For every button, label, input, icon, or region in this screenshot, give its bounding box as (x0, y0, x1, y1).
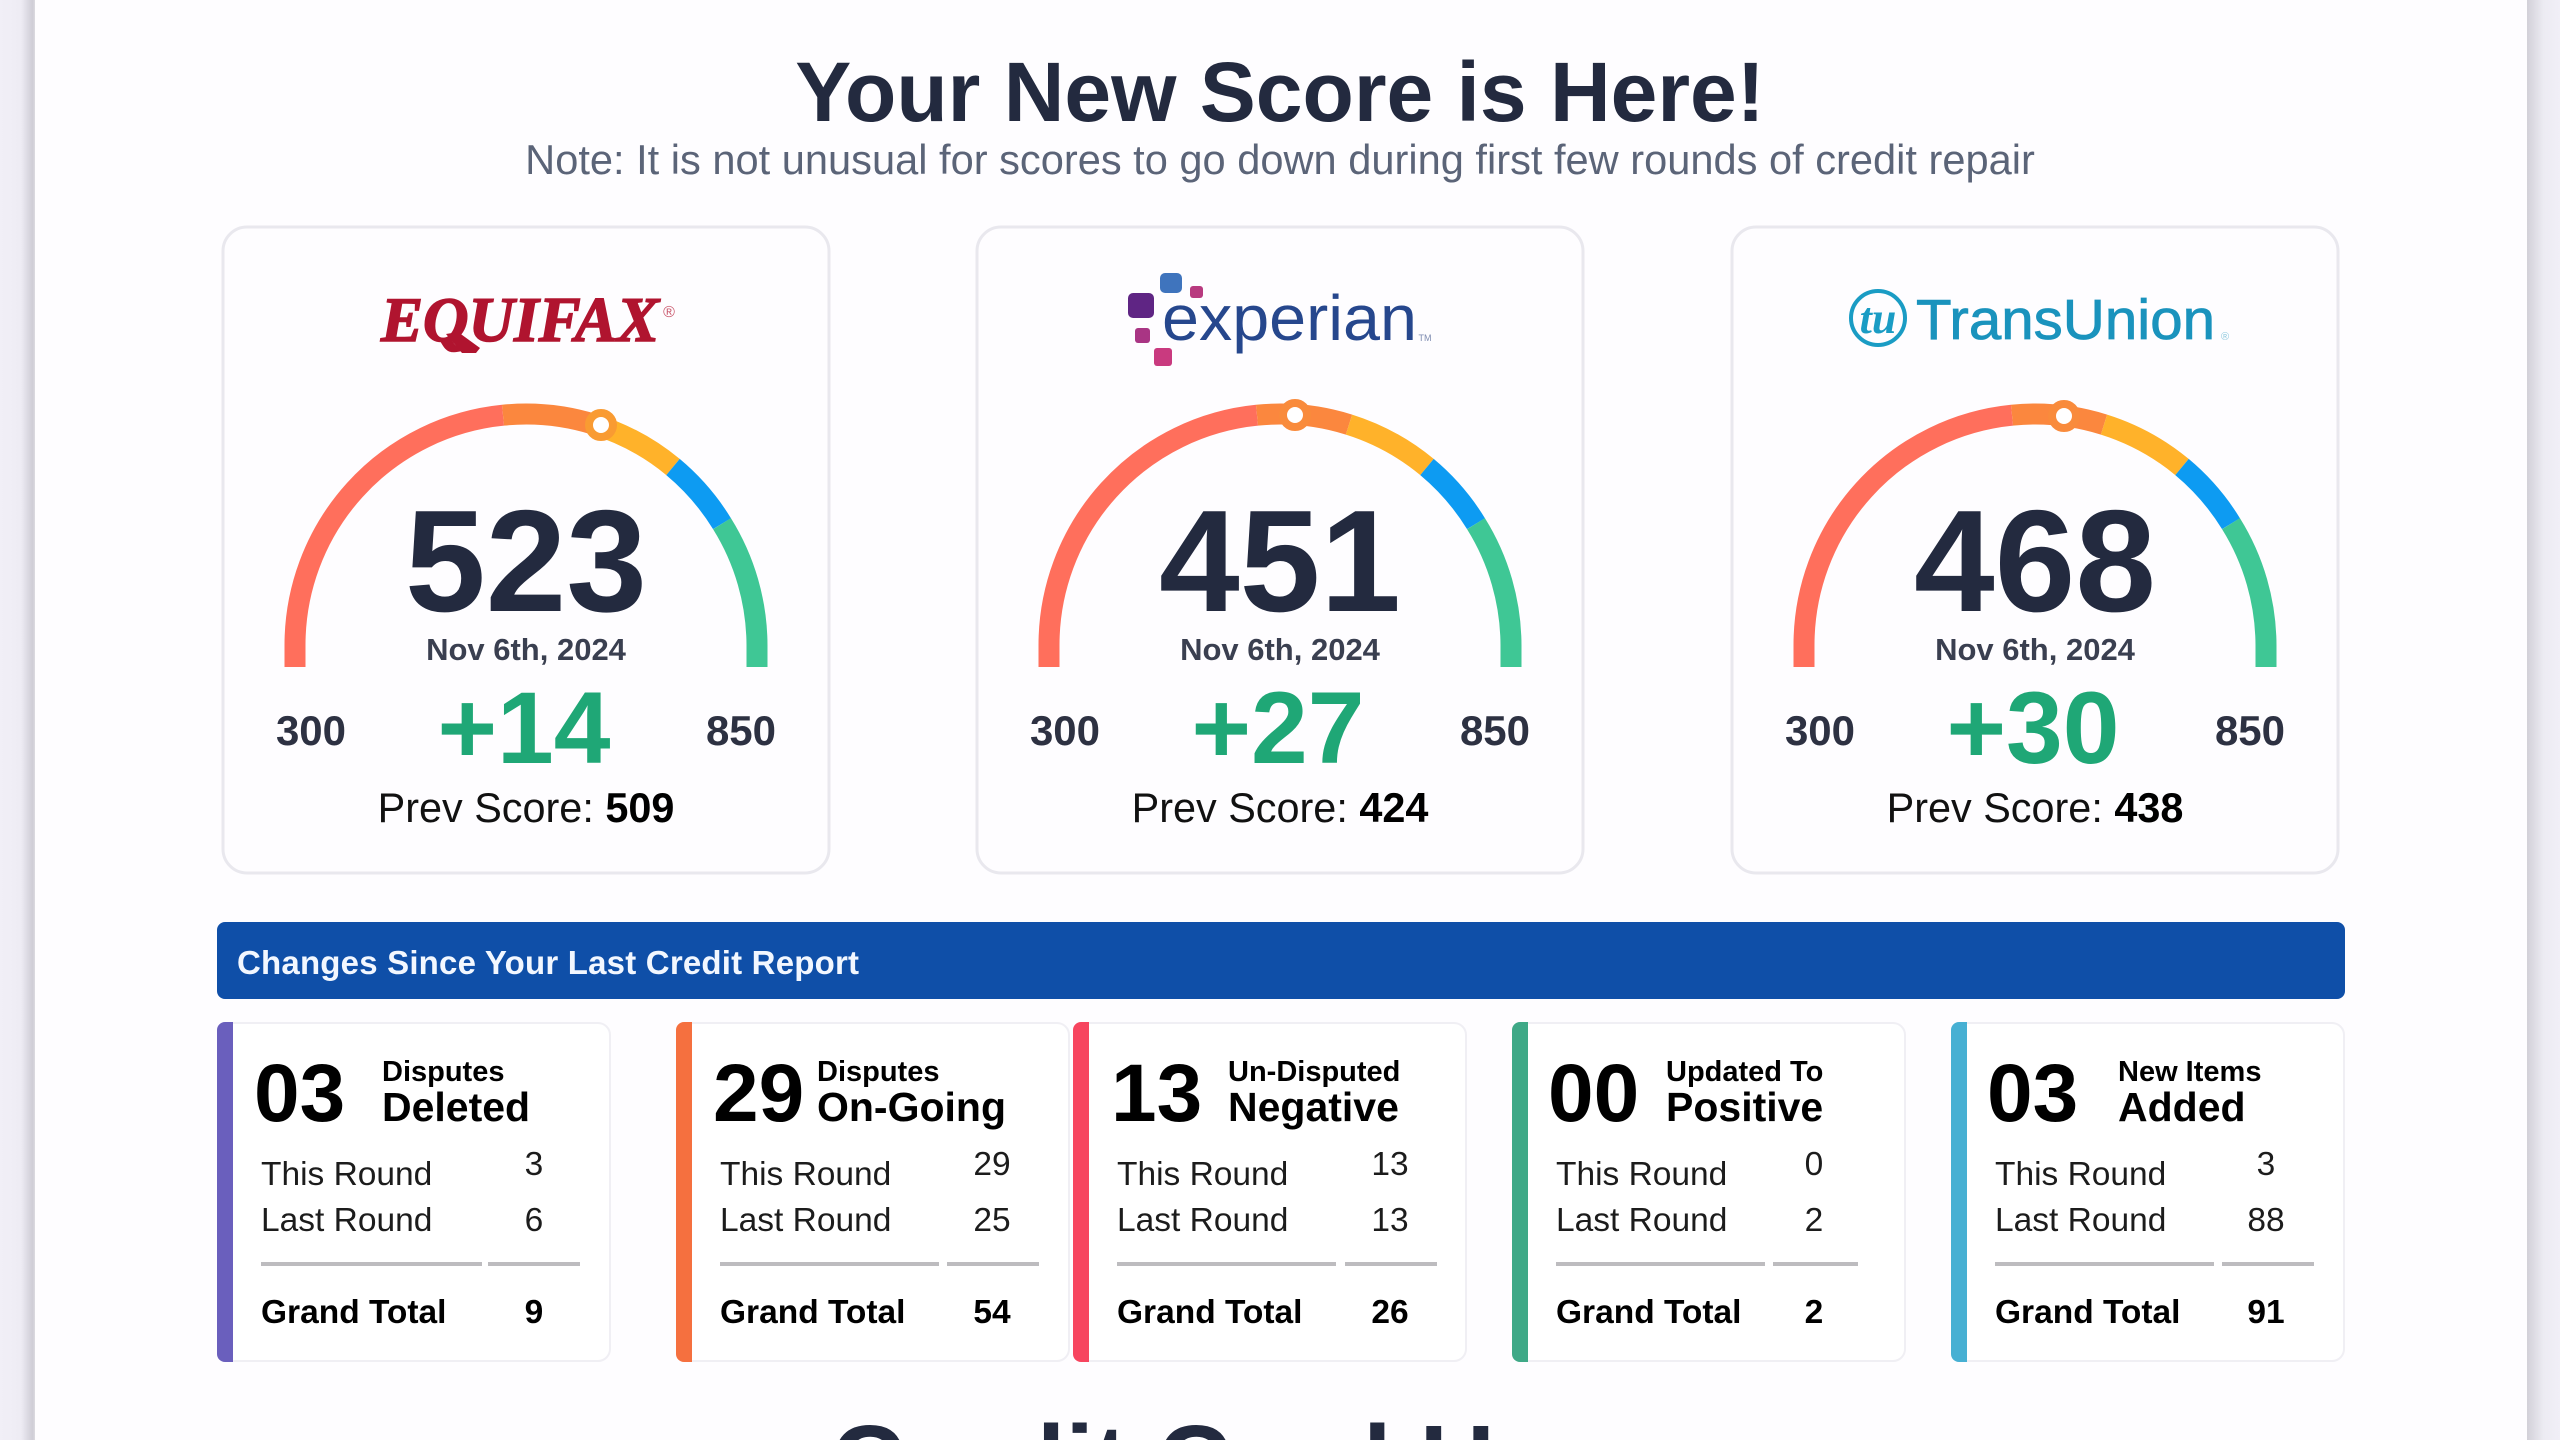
score change: +27 (1191, 671, 1365, 785)
logo: TransUnion: ® (2221, 331, 2229, 343)
panel: Equifax score (223, 227, 829, 873)
table: Last Round (1117, 1202, 1288, 1239)
gauge: Experian (1049, 403, 1511, 667)
range minimum: 300 (276, 707, 346, 754)
heading: Positive (1666, 1084, 1823, 1130)
count: 00 (1548, 1048, 1639, 1139)
table: Grand Total (1556, 1294, 1742, 1331)
range maximum: 850 (2215, 707, 2285, 754)
date: Nov 6th, 2024 (1935, 632, 2136, 667)
accent bar (1512, 1022, 1528, 1362)
table: This Round (261, 1156, 432, 1193)
table: 2 (1805, 1294, 1823, 1331)
logo: Equifax: EQUIFAX (380, 284, 660, 355)
table: 26 (1371, 1294, 1409, 1331)
table: 91 (2247, 1294, 2285, 1331)
panel: new items added (1951, 1022, 2344, 1362)
panel: disputes deleted (217, 1022, 610, 1362)
range minimum: 300 (1785, 707, 1855, 754)
gauge: Equifax (295, 413, 757, 667)
table: 3 (2257, 1146, 2275, 1183)
table (1117, 1146, 1437, 1331)
accent bar (1951, 1022, 1967, 1362)
heading: Added (2118, 1084, 2246, 1130)
table: This Round (1117, 1156, 1288, 1193)
table: Grand Total (720, 1294, 906, 1331)
heading: Deleted (382, 1084, 530, 1130)
section banner: Changes Since Your Last Credit Report (237, 944, 859, 981)
previous score: Prev Score: 509 (378, 785, 674, 831)
table (1995, 1146, 2314, 1331)
subtitle note: Note: It is not unusual for scores to go down during first few rounds of credit repair (525, 136, 2035, 183)
score change: +30 (1946, 671, 2120, 785)
table: 29 (973, 1146, 1011, 1183)
table: Grand Total (261, 1294, 446, 1331)
section banner (217, 922, 2345, 999)
logo: TransUnion: TransUnion (1916, 288, 2215, 352)
accent bar (217, 1022, 233, 1362)
heading: Disputes (382, 1056, 504, 1088)
table: 0 (1805, 1146, 1823, 1183)
table: 2 (1805, 1202, 1823, 1239)
score: 451 (1159, 480, 1401, 642)
heading: Negative (1228, 1084, 1399, 1130)
panel: updated to positive (1512, 1022, 1905, 1362)
count: 03 (254, 1048, 345, 1139)
table: 13 (1371, 1202, 1409, 1239)
table: 13 (1371, 1146, 1409, 1183)
table (261, 1146, 580, 1331)
table: This Round (1556, 1156, 1727, 1193)
heading: On-Going (817, 1084, 1006, 1130)
panel: TransUnion score (1732, 227, 2338, 873)
score: 468 (1914, 480, 2156, 642)
table: Grand Total (1117, 1294, 1302, 1331)
logo: Experian: TM (1418, 333, 1432, 343)
table (1556, 1146, 1858, 1331)
panel: Experian score (977, 227, 1583, 873)
heading: Un-Disputed (1228, 1056, 1400, 1088)
logo: TransUnion: tu (1860, 294, 1896, 343)
date: Nov 6th, 2024 (1180, 632, 1381, 667)
table: Last Round (1995, 1202, 2166, 1239)
score: 523 (405, 480, 647, 642)
panel: un-disputed negative (1073, 1022, 1466, 1362)
count: 13 (1111, 1048, 1202, 1139)
table: 54 (973, 1294, 1011, 1331)
accent bar (676, 1022, 692, 1362)
table: Last Round (261, 1202, 432, 1239)
heading: New Items (2118, 1056, 2261, 1088)
logo: Experian (1128, 273, 1432, 366)
table: 25 (973, 1202, 1011, 1239)
table: 6 (525, 1202, 543, 1239)
table: 3 (525, 1146, 543, 1183)
count: 03 (1987, 1048, 2078, 1139)
range minimum: 300 (1030, 707, 1100, 754)
title: Your New Score is Here! (795, 45, 1765, 139)
previous score: Prev Score: 438 (1887, 785, 2183, 831)
table: Grand Total (1995, 1294, 2180, 1331)
table: 9 (525, 1294, 543, 1331)
range maximum: 850 (1460, 707, 1530, 754)
range maximum: 850 (706, 707, 776, 754)
table: Last Round (720, 1202, 891, 1239)
logo: Equifax: ® (663, 304, 675, 321)
score change: +14 (437, 671, 611, 785)
table: 88 (2247, 1202, 2285, 1239)
heading: Updated To (1666, 1056, 1823, 1088)
table: This Round (1995, 1156, 2166, 1193)
heading: Disputes (817, 1056, 939, 1088)
gauge: TransUnion (1804, 404, 2266, 667)
panel: disputes on-going (676, 1022, 1069, 1362)
accent bar (1073, 1022, 1089, 1362)
table (720, 1146, 1039, 1331)
table: Last Round (1556, 1202, 1727, 1239)
logo: Experian: experian (1162, 282, 1417, 354)
table: This Round (720, 1156, 891, 1193)
previous score: Prev Score: 424 (1132, 785, 1428, 831)
count: 29 (713, 1048, 804, 1139)
date: Nov 6th, 2024 (426, 632, 627, 667)
